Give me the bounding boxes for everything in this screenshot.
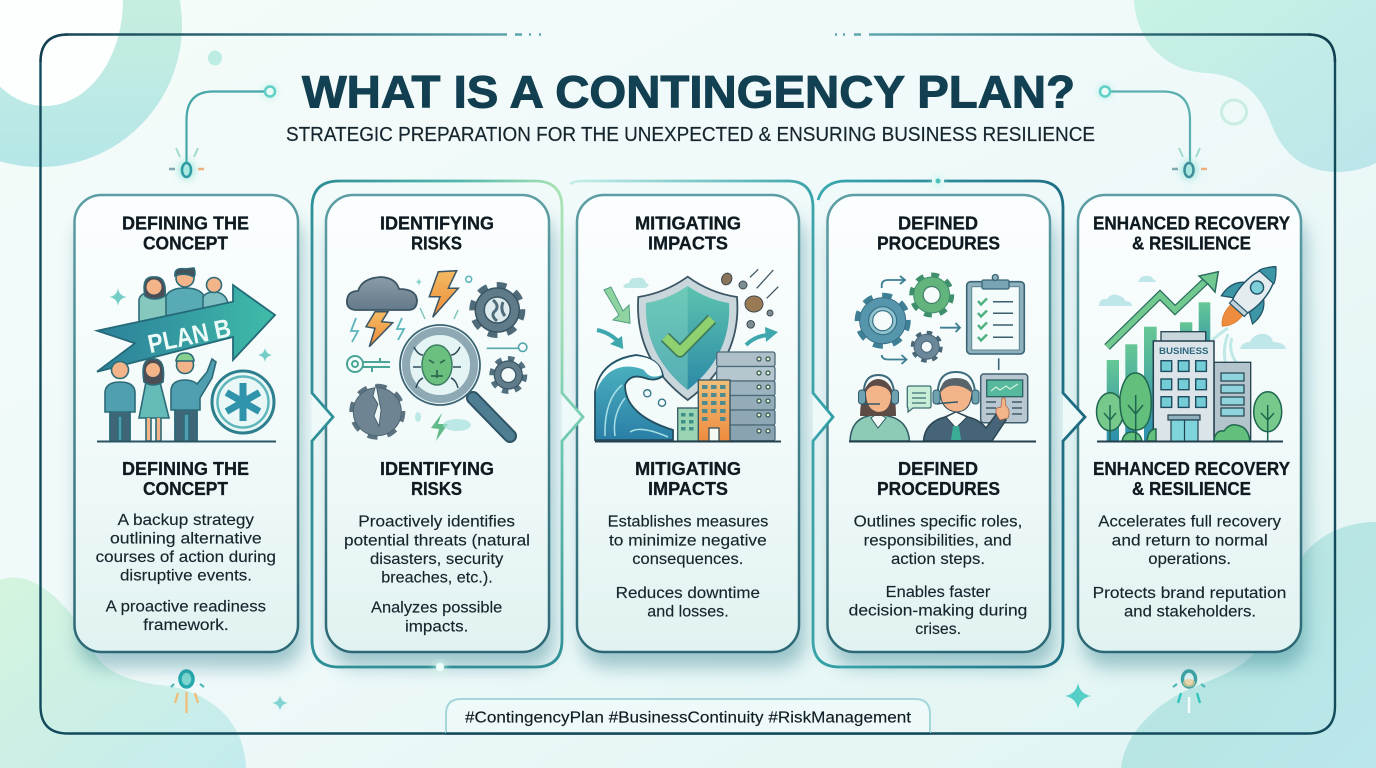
- main building: BUSINESS: [1159, 346, 1208, 357]
- server rack: [717, 352, 775, 441]
- icon: plan B team: [97, 268, 276, 442]
- card 1 heading: DEFINING THE: [122, 214, 249, 234]
- decoration: bottom-left bulb: [171, 671, 204, 713]
- title: WHAT IS A CONTINGENCY PLAN?: [302, 66, 1075, 118]
- card 3 heading: MITIGATING: [635, 214, 741, 234]
- small slate gear: [914, 334, 940, 360]
- growth arrow: [1107, 272, 1218, 347]
- card 4 title: PROCEDURES: [877, 479, 1000, 499]
- debris: [720, 271, 773, 328]
- card 5 body text: and stakeholders.: [1124, 604, 1256, 621]
- control panel: [981, 374, 1028, 423]
- small gear: [492, 359, 524, 391]
- card 5 body text: Protects brand reputation: [1093, 585, 1286, 602]
- card 2 title: [380, 459, 494, 499]
- icon: mitigating impacts: [595, 269, 781, 442]
- rocket: [1206, 252, 1292, 341]
- card 4 body text: Enables faster: [886, 584, 991, 601]
- connector: top-left with bulb: [169, 86, 276, 179]
- ground line: [849, 440, 1036, 442]
- card 1 body text: framework.: [143, 617, 229, 634]
- man with headset: [924, 372, 1009, 441]
- card 3 title: IMPACTS: [648, 479, 728, 499]
- card shadows: [78, 215, 1306, 667]
- card 5 title: ENHANCED RECOVERY: [1093, 459, 1290, 479]
- card 5 heading: [1093, 214, 1290, 254]
- card 1 heading: [122, 214, 249, 254]
- card 1 body text: disruptive events.: [120, 568, 252, 585]
- gear with cracked globe: [473, 286, 521, 334]
- card 4 body text: [849, 514, 1027, 638]
- flow frame: around card 3 and card 4: [570, 176, 1085, 667]
- card 2 title: IDENTIFYING: [380, 459, 494, 479]
- card 2 title: RISKS: [411, 479, 462, 499]
- storm cloud: [347, 277, 417, 310]
- decoration: sparkles: [272, 683, 1091, 711]
- card 1 title: [122, 459, 249, 499]
- clipboard checklist: [967, 274, 1024, 354]
- card 1 body text: courses of action during: [96, 549, 276, 566]
- card 1 heading: CONCEPT: [143, 234, 228, 254]
- card 2 body text: Analyzes possible: [371, 600, 502, 617]
- connector node and small ring: [487, 347, 518, 349]
- check mark: [665, 319, 712, 352]
- icon: defined procedures: [849, 274, 1036, 442]
- plan B label: PLAN B: [145, 312, 233, 359]
- ground line: [97, 440, 276, 442]
- card 5 heading: & RESILIENCE: [1132, 234, 1251, 254]
- trees and bushes: [1096, 373, 1282, 441]
- card 2 body text: potential threats (natural: [344, 532, 530, 549]
- clouds: [1099, 276, 1286, 349]
- card 3 heading: IMPACTS: [648, 234, 728, 254]
- card 2 body text: disasters, security: [370, 551, 503, 568]
- growth bars: [1107, 302, 1210, 441]
- card 5 title: [1093, 459, 1290, 499]
- hashtag tab: [446, 699, 930, 734]
- ground line: [1097, 440, 1283, 442]
- large lightning: [429, 271, 458, 317]
- main building: [1153, 332, 1214, 442]
- green gear: [913, 276, 951, 314]
- background blob: top-right: [1134, 0, 1376, 172]
- hashtag tab: #ContingencyPlan #BusinessContinuity #RiskManagement: [465, 710, 912, 727]
- card 2 heading: IDENTIFYING: [380, 214, 494, 234]
- lightning under cloud: [366, 312, 393, 347]
- exhaust wisps: [1212, 328, 1236, 365]
- icon: recovery and resilience: [1096, 252, 1292, 442]
- card 4 title: DEFINED: [898, 459, 978, 479]
- background blob: bottom-left: [0, 577, 246, 768]
- green bolt and smudge: [431, 413, 448, 441]
- card 4 body text: action steps.: [891, 551, 985, 568]
- card 1 body text: A proactive readiness: [106, 599, 266, 616]
- card 1 body text: outlining alternative: [110, 531, 262, 548]
- decoration: bottom-right bulb: [1173, 671, 1205, 713]
- card 5 body text: and return to normal: [1112, 532, 1268, 549]
- card 4 body text: decision-making during: [849, 603, 1027, 620]
- card 3 title: [635, 459, 741, 499]
- card 1 title: CONCEPT: [143, 479, 228, 499]
- top team: [139, 268, 228, 322]
- card 3 heading: [635, 214, 741, 254]
- bottom team: [105, 353, 216, 441]
- card 4 heading: [877, 214, 1000, 254]
- subtitle: STRATEGIC PREPARATION FOR THE UNEXPECTED & ENSURING BUSINESS RESILIENCE: [286, 124, 1095, 146]
- card 1 body text: A backup strategy: [118, 512, 254, 529]
- cracked gear: [353, 384, 401, 436]
- orange and green towers: [678, 408, 699, 441]
- card 4 body text: Outlines specific roles,: [854, 514, 1022, 531]
- card 2 body text: breaches, etc.).: [381, 570, 493, 587]
- medical emblem: [212, 371, 274, 433]
- card 3 body text: consequences.: [632, 551, 743, 568]
- decoration: small circles: [208, 50, 1246, 124]
- card 1 body text: [96, 512, 276, 634]
- card 3 body text: Establishes measures: [608, 514, 768, 531]
- card 2 body text: [344, 514, 530, 635]
- card 3 title: MITIGATING: [635, 459, 741, 479]
- speech note: [907, 386, 931, 412]
- card 3 body text: Reduces downtime: [616, 585, 760, 602]
- process arrows: [882, 276, 960, 364]
- card 4 heading: PROCEDURES: [877, 234, 1000, 254]
- key: [347, 356, 390, 372]
- wave: [595, 355, 673, 440]
- card 5 title: & RESILIENCE: [1132, 479, 1251, 499]
- card 2 body text: impacts.: [405, 618, 468, 635]
- card 2 heading: [380, 214, 494, 254]
- woman with headset: [850, 375, 910, 441]
- arrow banner: [97, 285, 275, 372]
- card 2 body text: Proactively identifies: [358, 514, 515, 531]
- flow frame: around card 2: [312, 181, 583, 672]
- background blob: top-left ring: [0, 0, 182, 167]
- panel: card backgrounds: [74, 195, 1301, 652]
- card 2 heading: RISKS: [411, 234, 462, 254]
- card 1 title: DEFINING THE: [122, 459, 249, 479]
- blue gear: [859, 297, 907, 345]
- arrows and cloud: [623, 278, 649, 288]
- card 4 body text: crises.: [915, 621, 961, 638]
- card 4 title: [877, 459, 1000, 499]
- card 4 heading: DEFINED: [898, 214, 978, 234]
- ground line: [595, 440, 781, 442]
- card 5 heading: ENHANCED RECOVERY: [1093, 214, 1290, 234]
- side building: [1214, 362, 1251, 441]
- card 5 body text: Accelerates full recovery: [1098, 514, 1281, 531]
- card 4 body text: responsibilities, and: [864, 532, 1012, 549]
- sparkles: [109, 288, 272, 362]
- card 5 body text: [1093, 514, 1286, 621]
- card 3 body text: and losses.: [647, 604, 729, 621]
- card 5 body text: operations.: [1148, 551, 1231, 568]
- shield: [638, 277, 737, 400]
- connector: top-right with bulb: [1099, 86, 1207, 179]
- icon: identifying risks: [347, 271, 527, 441]
- background blob: bottom-right: [1121, 522, 1376, 768]
- card 3 body text: [608, 514, 768, 621]
- card 3 body text: to minimize negative: [609, 532, 767, 549]
- magnifier with bug: [400, 325, 510, 436]
